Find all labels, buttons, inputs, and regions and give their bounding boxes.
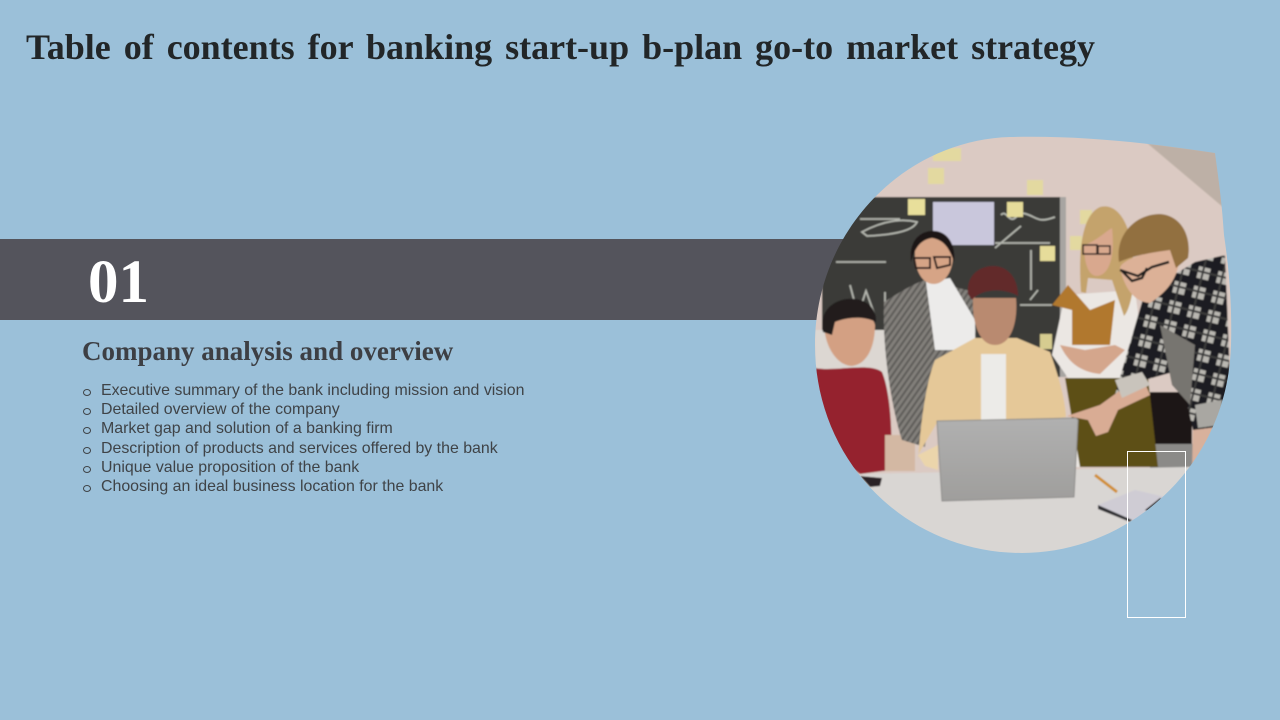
section heading: Company analysis and overview [82,336,453,366]
bullet list: Choosing an ideal business location for the bank [101,478,443,495]
section number: 01 [88,249,149,316]
person: man in beanie and tan jacket [918,266,1066,470]
storage box behind table [885,435,915,471]
title: Table of contents for banking start-up b-plan go-to market strategy [26,27,1095,67]
photo: team around a laptop in blob mask [815,136,1232,553]
sticky notes on wall [928,148,1092,250]
person: blonde woman with orange sweater [1052,206,1158,467]
table [859,466,1190,553]
bullet list: Detailed overview of the company [101,401,340,418]
floor patch [1150,444,1195,468]
bullet list: Executive summary of the bank including mission and vision [101,382,524,399]
laptop [937,418,1078,501]
blackboard [822,197,1066,377]
person: man in plaid shirt [1067,214,1232,436]
phone on table [860,476,882,487]
wall [815,136,1232,474]
bullet list [83,382,524,495]
person: man in red sweater [815,299,891,474]
wall corner shadow [1147,143,1224,208]
decorative white outline rectangle [1127,451,1186,618]
notebook [1098,490,1165,522]
pencil [1095,475,1117,492]
dark bag behind people [1150,392,1192,444]
bullet list: Market gap and solution of a banking firm [101,420,393,437]
bullet list: Unique value proposition of the bank [101,459,359,476]
section band [0,239,850,320]
bullet list: Description of products and services offered by the bank [101,440,498,457]
forearm and wrist at right [1191,426,1212,464]
person: woman in tweed blazer [884,231,976,447]
